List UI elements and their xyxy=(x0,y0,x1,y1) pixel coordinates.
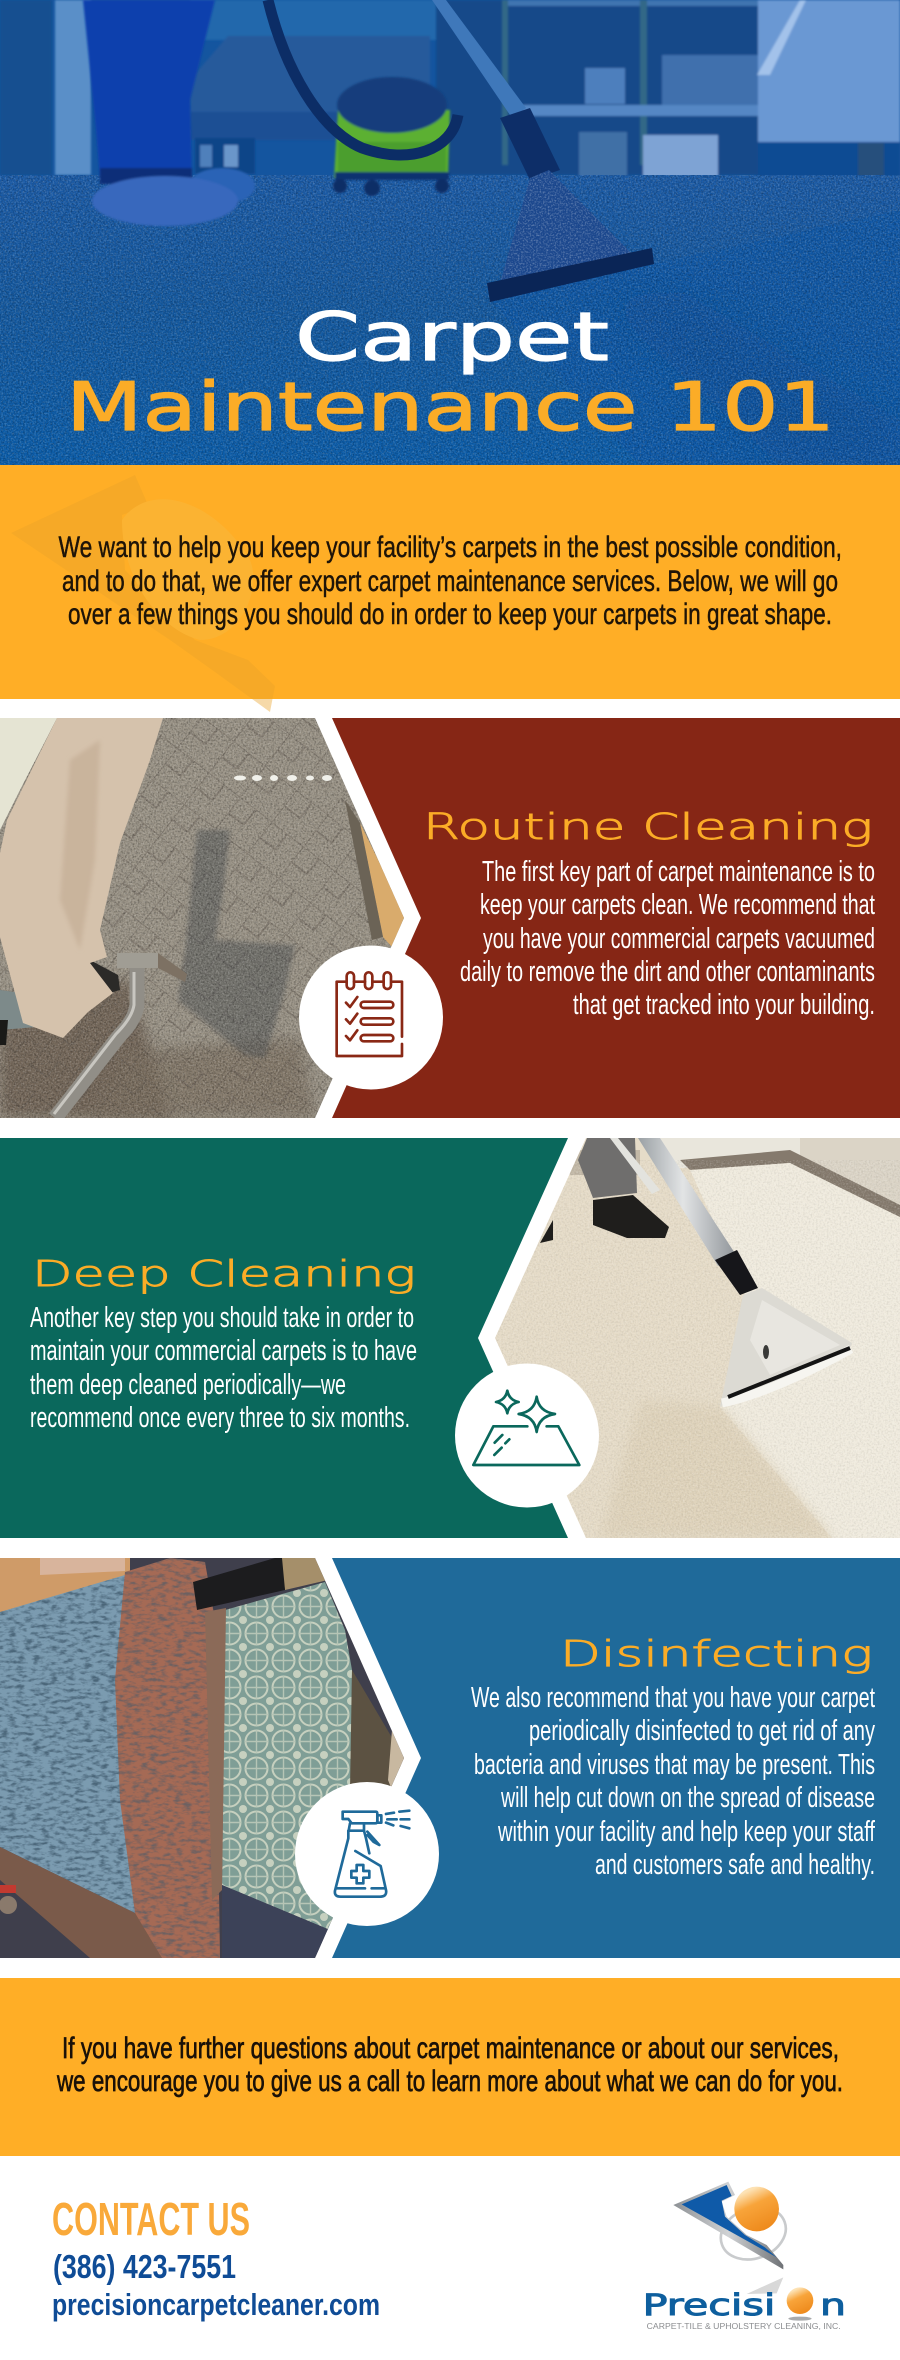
logo mark xyxy=(673,2182,793,2269)
photo: wand on cream carpet xyxy=(480,1138,900,1538)
panel: deep cleaning xyxy=(0,1138,900,1538)
panel: disinfecting xyxy=(0,1558,900,1958)
closing text xyxy=(56,2032,843,2098)
watermark logo xyxy=(11,475,275,712)
logo wordmark: n xyxy=(820,2288,846,2322)
logo xyxy=(643,2182,846,2331)
closing band xyxy=(0,1978,900,2156)
heading: Disinfecting xyxy=(560,1634,873,1675)
title xyxy=(74,310,828,432)
carpet xyxy=(0,175,900,465)
wand and nozzle xyxy=(432,0,526,118)
heading: Deep Cleaning xyxy=(32,1254,416,1295)
icon: spray bottle xyxy=(295,1782,439,1926)
body text xyxy=(460,856,875,1021)
intro text xyxy=(58,531,842,631)
green shape xyxy=(0,1138,568,1538)
hero: blue-tinted carpet cleaning photo with title xyxy=(0,0,900,465)
contact block xyxy=(52,2193,380,2322)
body text xyxy=(30,1302,417,1434)
heading: Routine Cleaning xyxy=(423,807,873,848)
photo: vacuum on patterned carpet xyxy=(0,718,410,1118)
vacuum xyxy=(333,77,450,196)
logo wordmark xyxy=(643,2277,846,2331)
body text: them deep cleaned periodically—we xyxy=(30,1369,346,1401)
title: Carpet xyxy=(295,298,609,376)
logo wordmark: Precisi xyxy=(643,2288,775,2322)
body text: Another key step you should take in order to xyxy=(30,1302,414,1334)
hose xyxy=(268,0,458,155)
hero photo xyxy=(0,0,900,465)
intro band xyxy=(0,465,900,712)
red shape xyxy=(332,718,900,1118)
panel: routine cleaning xyxy=(0,718,900,1118)
icon: sparkling carpet xyxy=(455,1364,599,1508)
body text xyxy=(471,1682,876,1881)
contact heading: CONTACT US xyxy=(52,2193,250,2245)
blue shape xyxy=(332,1558,900,1958)
title: Maintenance 101 xyxy=(66,368,835,446)
body text: maintain your commercial carpets is to have xyxy=(30,1335,417,1367)
legs and shoe covers xyxy=(83,0,255,226)
logo wordmark: CARPET-TILE & UPHOLSTERY CLEANING, INC. xyxy=(647,2322,841,2331)
body text: recommend once every three to six months. xyxy=(30,1402,410,1434)
phone number: (386) 423-7551 xyxy=(53,2248,236,2285)
website: precisioncarpetcleaner.com xyxy=(52,2287,380,2322)
icon: checklist xyxy=(299,946,443,1090)
photo: hanging shag rugs xyxy=(0,1558,410,1958)
